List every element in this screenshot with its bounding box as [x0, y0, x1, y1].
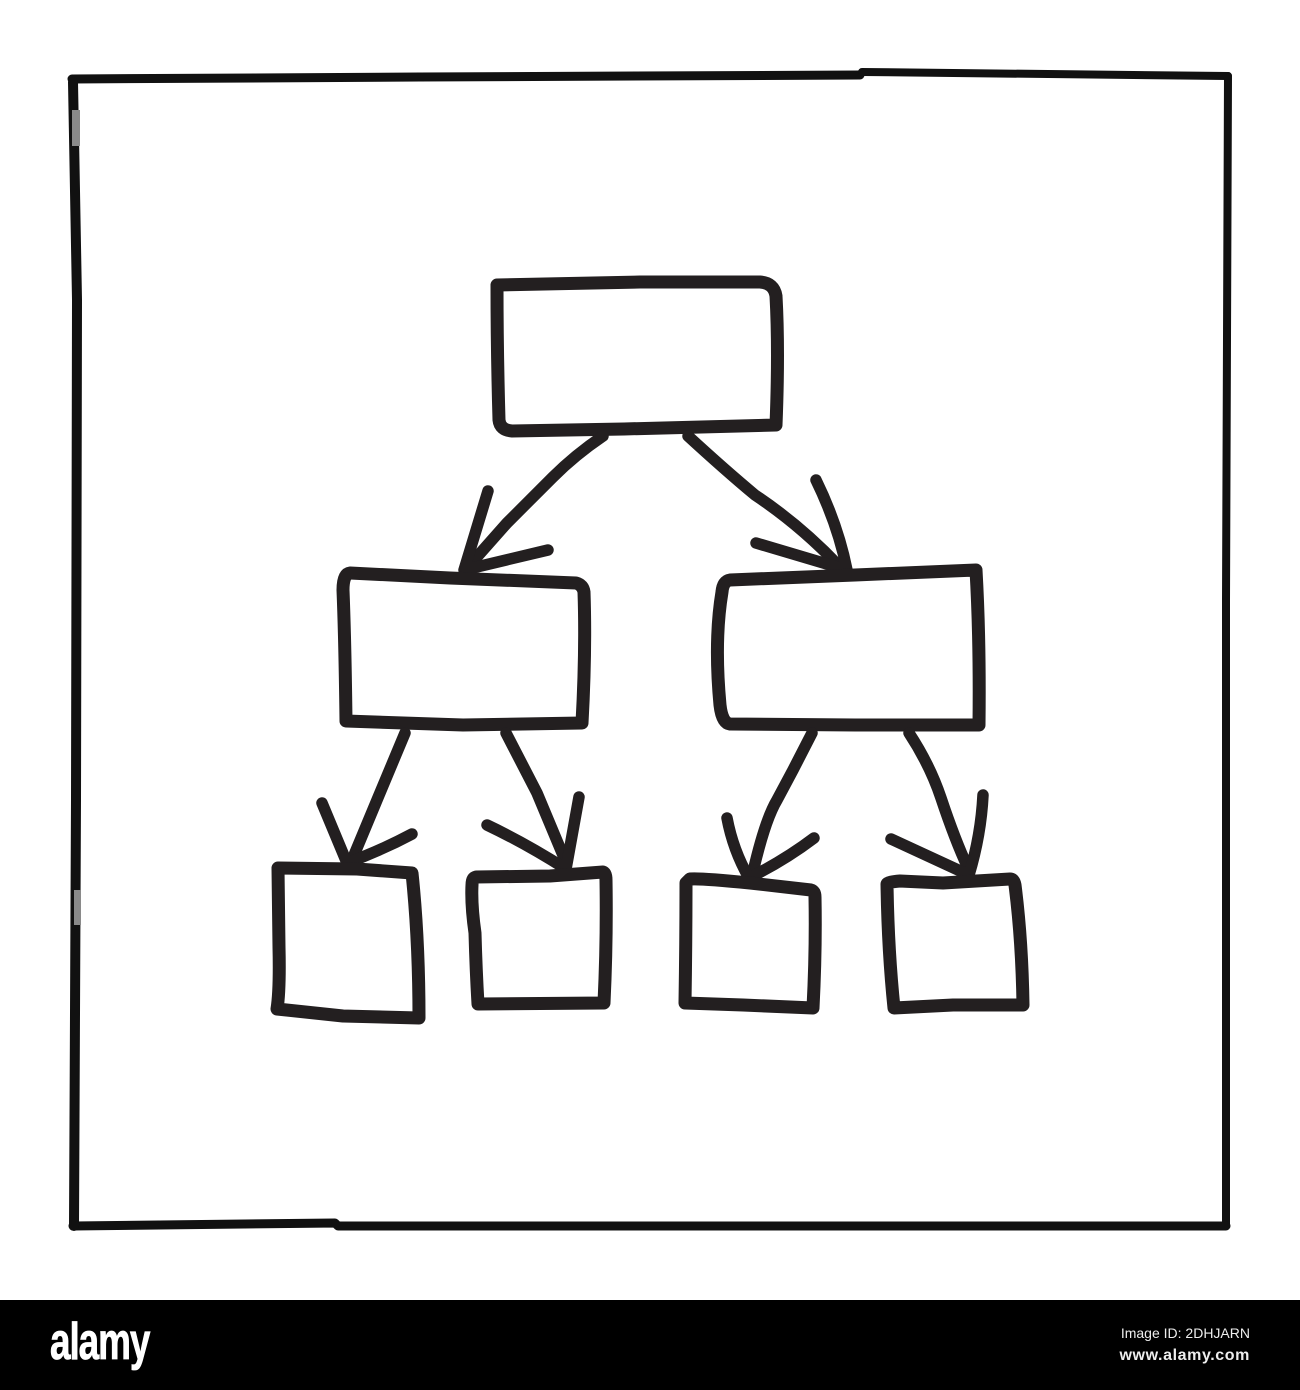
footer logo: alamy — [50, 1313, 149, 1371]
middle right box — [717, 570, 979, 725]
top box — [497, 282, 778, 431]
footer image id: Image ID: 2DHJARN — [1121, 1325, 1250, 1341]
arrow: top to middle right — [688, 436, 847, 570]
arrow: middle right to bottom 3 — [727, 733, 814, 878]
bottom box 4 — [887, 879, 1023, 1008]
bottom box 1 — [277, 868, 419, 1018]
arrow: middle left to bottom 1 — [322, 733, 412, 863]
arrow: middle left to bottom 2 — [487, 733, 579, 869]
footer image id — [1119, 1325, 1250, 1364]
arrow: middle right to bottom 4 — [891, 733, 983, 875]
outer hand-drawn frame — [72, 72, 1228, 1226]
middle left box — [343, 573, 585, 725]
bottom box 3 — [685, 879, 815, 1008]
arrow: top to middle left — [464, 436, 603, 570]
bottom box 2 — [472, 872, 606, 1004]
footer bar — [0, 1300, 1300, 1390]
footer image id: www.alamy.com — [1119, 1347, 1250, 1364]
